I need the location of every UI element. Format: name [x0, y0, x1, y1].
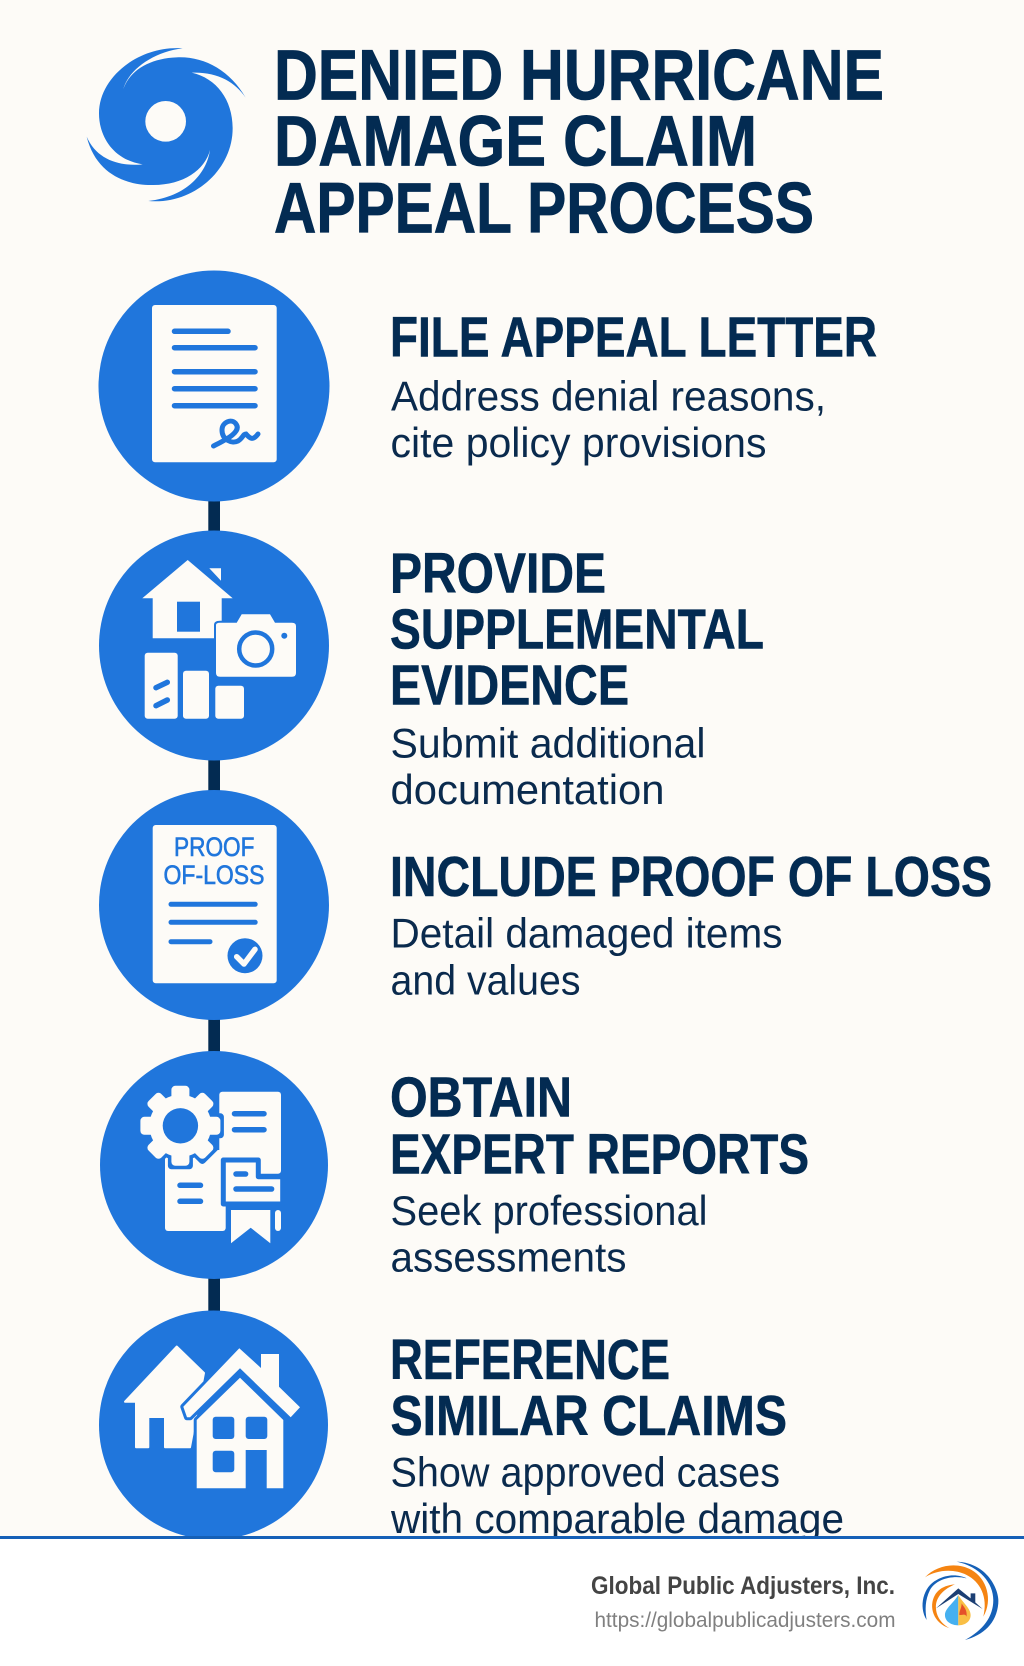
description: step 1: Address denial reasons, [391, 372, 826, 420]
heading: provide supplemental evidence: EVIDENCE [390, 654, 629, 718]
logo: global public adjusters [923, 1562, 998, 1640]
description: step 5: with comparable damage [390, 1495, 844, 1542]
description: step 3: Detail damaged items [390, 910, 782, 956]
icon: proof of loss document: PROOF [174, 832, 254, 862]
description: step 1 [390, 372, 826, 466]
panel: step 4 obtain expert reports [100, 1051, 809, 1280]
heading: obtain expert reports: EXPERT REPORTS [390, 1122, 809, 1186]
description: step 3 [390, 910, 782, 1004]
panel: step 5 reference similar claims [99, 1310, 844, 1542]
title [274, 36, 884, 248]
icon: signed letter [98, 270, 330, 502]
icon: proof of loss document [99, 790, 329, 1020]
icon: two houses [99, 1310, 328, 1540]
description: step 2: documentation [390, 766, 664, 813]
icon: hurricane symbol [87, 48, 246, 201]
description: step 5 [390, 1448, 844, 1542]
description: step 5: Show approved cases [390, 1448, 780, 1496]
panel: step 3 include proof of loss [99, 790, 992, 1020]
panel: footer [0, 1536, 1024, 1666]
description: step 1: cite policy provisions [390, 419, 766, 466]
heading: provide supplemental evidence [390, 542, 764, 718]
heading: reference similar claims [390, 1328, 787, 1448]
icon: proof of loss document: OF-LOSS [164, 860, 264, 890]
icon: gear, reports and ribbon [100, 1051, 328, 1279]
heading: reference similar claims: REFERENCE [390, 1328, 670, 1392]
description: step 4: Seek professional [390, 1187, 708, 1234]
title: DENIED HURRICANE [274, 36, 884, 116]
timeline connector [208, 480, 220, 1330]
heading: obtain expert reports: OBTAIN [390, 1066, 572, 1130]
description: step 3: and values [390, 956, 580, 1004]
heading: provide supplemental evidence: SUPPLEMENTAL [390, 598, 764, 662]
company name: Global Public Adjusters, Inc. [591, 1572, 895, 1600]
panel: step 1 file appeal letter [98, 270, 877, 502]
title: DAMAGE CLAIM [274, 102, 757, 182]
icon: house, camera and documents [99, 530, 329, 760]
heading: reference similar claims: SIMILAR CLAIMS [390, 1384, 787, 1448]
heading: obtain expert reports [390, 1066, 809, 1186]
company url: https://globalpublicadjusters.com [594, 1608, 896, 1632]
panel: step 2 provide supplemental evidence [99, 530, 764, 813]
description: step 4: assessments [390, 1234, 626, 1280]
title: APPEAL PROCESS [274, 170, 814, 248]
heading: provide supplemental evidence: PROVIDE [390, 542, 606, 606]
description: step 4 [390, 1187, 708, 1280]
heading: file appeal letter: FILE APPEAL LETTER [390, 306, 877, 370]
description: step 2 [390, 720, 706, 813]
description: step 2: Submit additional [390, 720, 706, 766]
